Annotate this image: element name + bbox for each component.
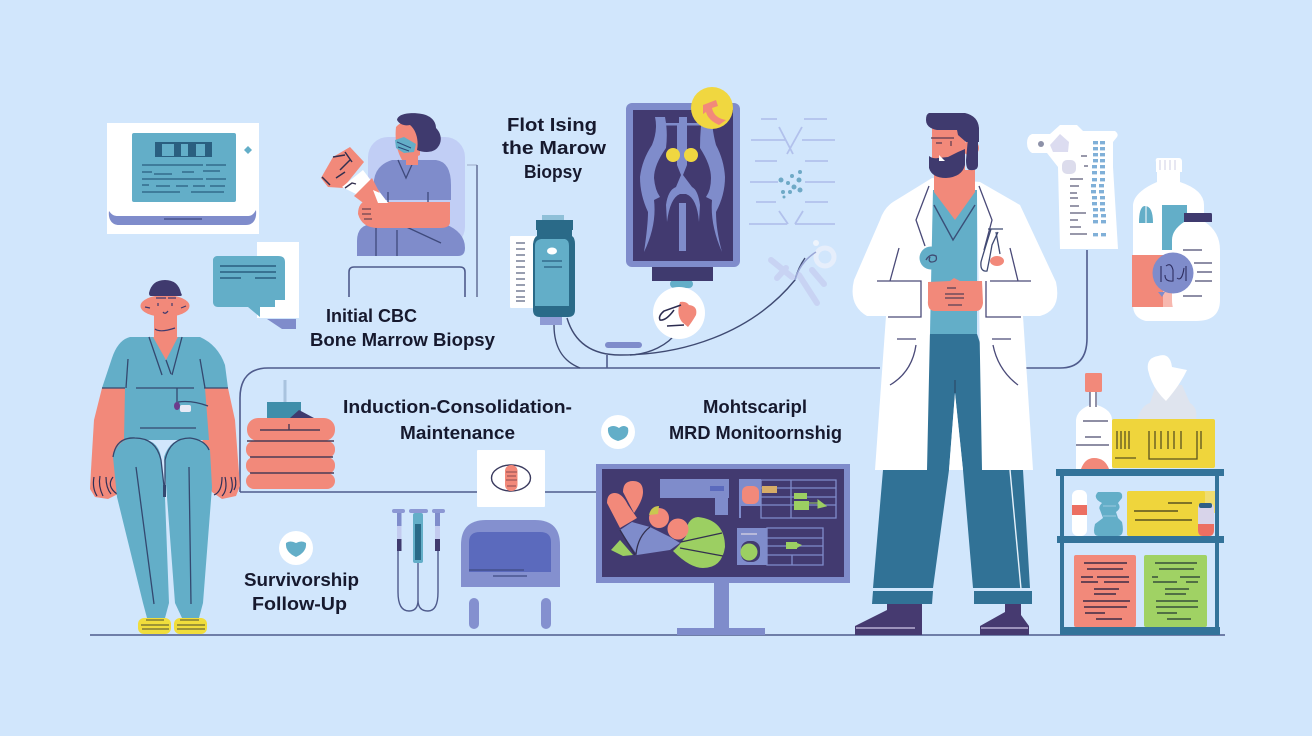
icon: heart circle right bbox=[601, 415, 635, 449]
text: Initial CBC, Bone Marrow Biopsy: Initial CBC bbox=[326, 306, 417, 326]
rod bbox=[605, 342, 642, 348]
doctor neck bbox=[934, 170, 975, 220]
icon: test tubes bbox=[392, 509, 445, 611]
doctor coat bbox=[853, 178, 1057, 470]
icon: speech bubble bbox=[213, 242, 299, 329]
text: Mohtscaripl MRD Monitoornshig: Mohtscaripl bbox=[703, 397, 807, 417]
patient badge bbox=[174, 402, 191, 412]
icon: molecular branch bbox=[771, 240, 834, 303]
text: Survivorship Follow-Up: Follow-Up bbox=[252, 594, 347, 614]
icon: imaging device bbox=[461, 520, 560, 629]
connector lines bbox=[90, 250, 1225, 635]
icon: cell cluster bbox=[778, 170, 802, 198]
text: Flot Ising the Marow Biopsy: the Marow bbox=[502, 138, 607, 158]
text: Initial CBC, Bone Marrow Biopsy: Bone Marrow Biopsy bbox=[310, 330, 495, 350]
text: Survivorship Follow-Up bbox=[244, 570, 359, 614]
text: Mohtscaripl MRD Monitoornshig bbox=[669, 397, 842, 443]
doctor head bbox=[926, 113, 979, 178]
anatomy illustration bbox=[607, 481, 725, 568]
tissue box bbox=[1112, 355, 1215, 468]
doctor stethoscope bbox=[920, 229, 1004, 271]
icon: infusion bottle bbox=[510, 215, 575, 325]
doctor scrub top bbox=[930, 190, 977, 334]
text: Mohtscaripl MRD Monitoornshig: MRD Monitoornshig bbox=[669, 423, 842, 443]
text: Induction-Consolidation-Maintenance bbox=[343, 397, 572, 443]
data table top bbox=[739, 479, 836, 518]
patient legs bbox=[113, 438, 212, 630]
decorative data lines bbox=[749, 119, 835, 224]
doctor trousers bbox=[855, 334, 1032, 635]
data table bottom bbox=[737, 528, 823, 565]
shelf frame bbox=[1056, 469, 1224, 635]
tubing wires bbox=[554, 258, 805, 368]
scroll held by nurse bbox=[321, 147, 388, 208]
nurse with mask bbox=[321, 113, 477, 297]
green document bbox=[1144, 555, 1207, 627]
chart: x-ray display bbox=[626, 87, 740, 288]
icon: tissue sample circle bbox=[653, 287, 705, 339]
doctor hands bbox=[928, 278, 983, 311]
IV bag with dosing table bbox=[1027, 125, 1118, 249]
doctor in white coat bbox=[853, 113, 1057, 635]
shelf with supplies bbox=[1056, 355, 1224, 635]
vial and jar bbox=[1072, 490, 1123, 536]
text: Flot Ising the Marow Biopsy: Biopsy bbox=[524, 162, 582, 182]
text: Survivorship Follow-Up: Survivorship bbox=[244, 570, 359, 590]
white bottle bbox=[1076, 373, 1112, 469]
icon: heart circle left bbox=[279, 531, 313, 565]
upper panel bbox=[660, 479, 729, 515]
icon: eye card bbox=[477, 450, 545, 507]
medicine bottles bbox=[1132, 158, 1220, 321]
yellow packet bbox=[1127, 491, 1215, 536]
text: Initial CBC, Bone Marrow Biopsy bbox=[310, 306, 495, 350]
text: Flot Ising the Marow Biopsy bbox=[502, 115, 607, 182]
patient top bbox=[102, 337, 228, 440]
text: Induction-Consolidation-Maintenance: Induction-Consolidation- bbox=[343, 397, 572, 417]
text: Flot Ising the Marow Biopsy: Flot Ising bbox=[507, 115, 597, 135]
patient arms bbox=[90, 388, 240, 499]
salmon document bbox=[1074, 555, 1136, 627]
icon: salmon bag bbox=[246, 380, 335, 489]
patient head bbox=[140, 280, 190, 340]
icon: laptop with report bbox=[107, 123, 259, 234]
text: Induction-Consolidation-Maintenance: Maintenance bbox=[400, 423, 515, 443]
patient in teal scrubs bbox=[90, 280, 240, 634]
patient shoes bbox=[138, 618, 207, 634]
monitoring display bbox=[596, 464, 850, 635]
